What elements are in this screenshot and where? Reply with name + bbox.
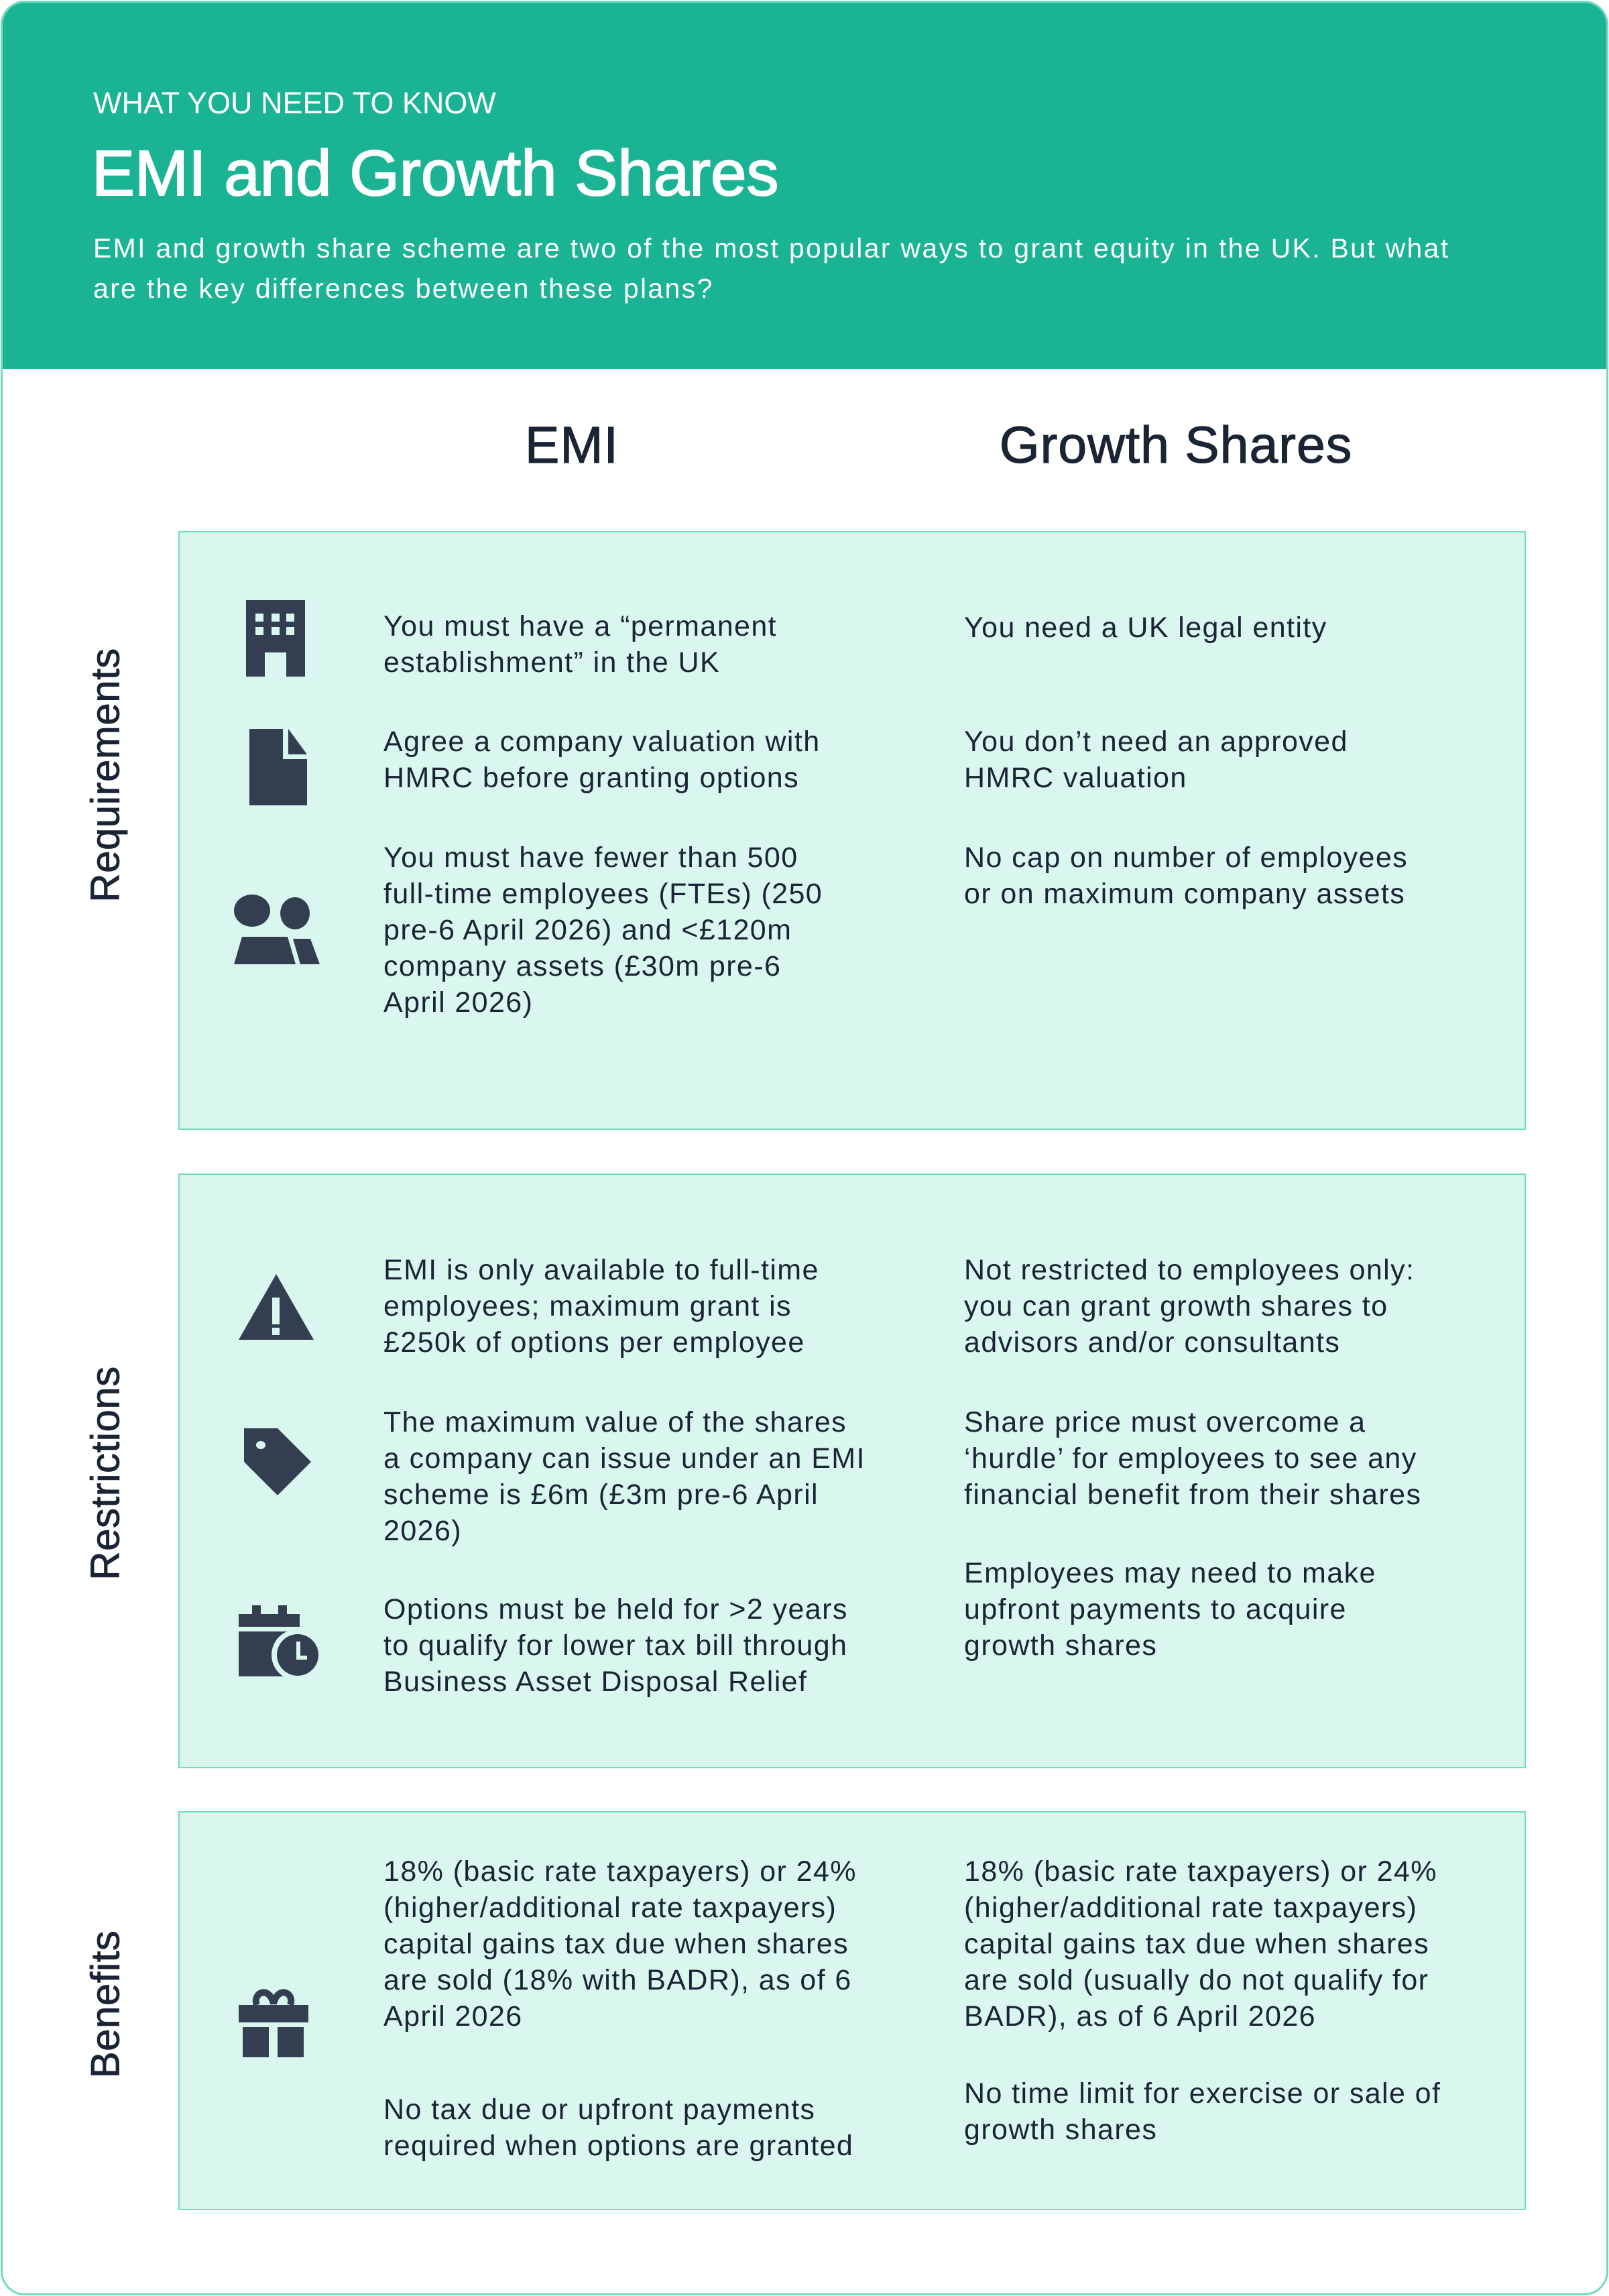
column heading: EMI: EMI (525, 416, 619, 474)
text: GS res 2: ‘hurdle’ for employees to see any (964, 1442, 1417, 1475)
text: EMI ben 2: No tax due or upfront payments (383, 2093, 815, 2126)
text: GS ben 1: are sold (usually do not qualify for (964, 1964, 1429, 1996)
text: EMI ben 1: April 2026 (383, 2000, 523, 2032)
text: GS ben 1 (964, 1855, 1437, 2032)
kicker: WHAT YOU NEED TO KNOW (93, 86, 496, 120)
text: GS res 2 (964, 1406, 1421, 1511)
text: EMI req 2: Agree a company valuation with (383, 726, 821, 758)
title: EMI and Growth Shares (92, 137, 778, 209)
panel: benefits (178, 1811, 1526, 2210)
text: EMI res 3: Options must be held for >2 years (383, 1593, 848, 1625)
text: GS res 1: Not restricted to employees only: (964, 1254, 1415, 1286)
text: EMI ben 1: are sold (18% with BADR), as of 6 (383, 1964, 852, 1996)
text: EMI ben 1: (higher/additional rate taxpayers) (383, 1892, 837, 1924)
text: GS ben 1: 18% (basic rate taxpayers) or 24% (964, 1855, 1437, 1888)
text: GS res 3: growth shares (964, 1629, 1157, 1662)
text: GS res 1 (964, 1254, 1415, 1359)
text: GS req 2: HMRC valuation (964, 762, 1187, 794)
icon: gift (239, 1989, 308, 2057)
text: EMI res 2: scheme is £6m (£3m pre-6 April (383, 1479, 819, 1511)
text: EMI req 1: establishment” in the UK (383, 646, 720, 679)
text: EMI req 3: company assets (£30m pre-6 (383, 950, 781, 982)
text: EMI ben 2: required when options are granted (383, 2130, 853, 2162)
icon: document (249, 729, 307, 805)
text: EMI res 1: £250k of options per employee (383, 1326, 805, 1359)
header banner (3, 3, 1609, 369)
text: EMI res 3 (383, 1593, 848, 1698)
text: EMI req 3: pre-6 April 2026) and <£120m (383, 914, 792, 946)
icon: tag (244, 1428, 311, 1495)
text: EMI res 2 (383, 1406, 866, 1547)
text: EMI res 1: EMI is only available to full-time (383, 1254, 819, 1286)
text: GS req 3: No cap on number of employees (964, 842, 1408, 874)
panel: restrictions (178, 1173, 1526, 1768)
text: GS res 3: Employees may need to make (964, 1557, 1376, 1589)
side label: Restrictions: Restrictions (83, 1366, 127, 1581)
panel: requirements (178, 531, 1526, 1130)
text: EMI ben 2 (383, 2093, 853, 2162)
text: GS res 1: you can grant growth shares to (964, 1290, 1388, 1322)
text: GS ben 2: growth shares (964, 2114, 1157, 2146)
side label: Requirements: Requirements (83, 648, 127, 903)
text: EMI req 3: April 2026) (383, 986, 533, 1019)
text: EMI req 3: full-time employees (FTEs) (250 (383, 878, 823, 910)
text: GS res 3: upfront payments to acquire (964, 1593, 1347, 1625)
text: EMI ben 1: capital gains tax due when shares (383, 1928, 849, 1960)
icon: building (246, 600, 305, 677)
text: GS ben 2 (964, 2077, 1441, 2146)
text: EMI ben 1 (383, 1855, 857, 2032)
text: EMI res 1: employees; maximum grant is (383, 1290, 792, 1322)
text: EMI res 3: to qualify for lower tax bill through (383, 1629, 847, 1662)
text: EMI req 2: HMRC before granting options (383, 762, 799, 794)
text: EMI req 2 (383, 726, 821, 794)
text: EMI res 3: Business Asset Disposal Relief (383, 1666, 807, 1698)
text: EMI req 3 (383, 842, 823, 1019)
text: GS res 1: advisors and/or consultants (964, 1326, 1340, 1359)
text: GS req 2: You don’t need an approved (964, 726, 1348, 758)
icon: calendar clock (239, 1605, 318, 1676)
text: GS ben 1: (higher/additional rate taxpayers) (964, 1892, 1417, 1924)
text: GS ben 2: No time limit for exercise or sale of (964, 2077, 1441, 2110)
icon: people (234, 895, 320, 964)
text: GS res 3 (964, 1557, 1376, 1662)
text: EMI res 1 (383, 1254, 819, 1359)
text: EMI req 1 (383, 610, 777, 679)
text: GS res 2: financial benefit from their shares (964, 1479, 1421, 1511)
text: GS req 3: or on maximum company assets (964, 878, 1405, 910)
text: GS ben 1: BADR), as of 6 April 2026 (964, 2000, 1316, 2032)
text: EMI req 1: You must have a “permanent (383, 610, 777, 642)
text: GS res 2: Share price must overcome a (964, 1406, 1366, 1438)
icon: warning (239, 1274, 314, 1340)
text: GS req 3 (964, 842, 1408, 910)
text: EMI res 2: 2026) (383, 1515, 462, 1547)
text: GS req 1: You need a UK legal entity (964, 612, 1327, 644)
text: EMI res 2: The maximum value of the shares (383, 1406, 847, 1438)
text: GS ben 1: capital gains tax due when shares (964, 1928, 1429, 1960)
side label: Benefits: Benefits (83, 1931, 127, 2078)
column heading: Growth Shares: Growth Shares (1000, 416, 1352, 474)
subtitle: EMI and growth share scheme are two of the most popular ways to grant equity in the UK. But what (93, 233, 1449, 264)
text: GS req 2 (964, 726, 1348, 794)
subtitle (93, 233, 1449, 304)
text: EMI res 2: a company can issue under an EMI (383, 1442, 866, 1475)
subtitle: are the key differences between these plans? (93, 273, 714, 304)
text: EMI req 3: You must have fewer than 500 (383, 842, 798, 874)
text: EMI ben 1: 18% (basic rate taxpayers) or 24% (383, 1855, 857, 1888)
